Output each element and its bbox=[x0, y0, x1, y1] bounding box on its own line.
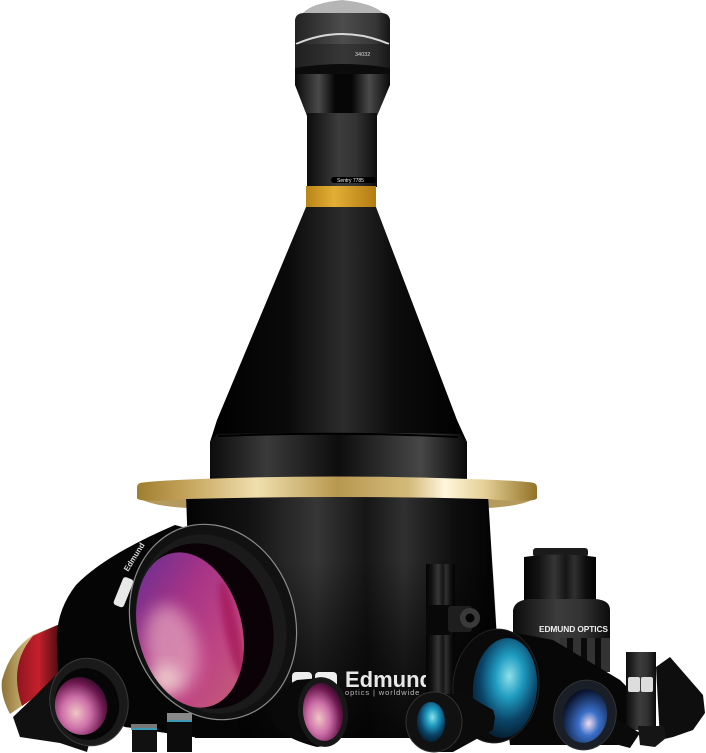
front blue lens bbox=[406, 692, 495, 752]
logo on barrel bbox=[113, 541, 147, 608]
ring underside bbox=[137, 496, 537, 508]
miniature lenses bbox=[131, 713, 192, 752]
cone base bbox=[210, 433, 467, 480]
large pink lens bbox=[56, 524, 298, 738]
neck bbox=[307, 113, 377, 187]
label: EDMUND OPTICS bbox=[539, 624, 608, 634]
lower body bbox=[186, 495, 497, 738]
logo mark bbox=[292, 672, 312, 688]
lens reflection bbox=[137, 580, 249, 696]
small blue lens bbox=[547, 674, 640, 753]
camera lens top right bbox=[513, 548, 610, 672]
post lens with side knob bbox=[426, 564, 480, 694]
main telecentric lens: Sentry 7785 bbox=[337, 178, 364, 184]
main telecentric lens bbox=[137, 0, 537, 738]
gold ring bbox=[137, 476, 537, 501]
Edmund Optics logo on body bbox=[292, 667, 433, 697]
center pink lens bbox=[272, 675, 352, 749]
Edmund Optics logo on body: optics | worldwide bbox=[345, 688, 420, 697]
logo on barrel: Edmund bbox=[122, 541, 147, 573]
small pink lens bbox=[13, 651, 136, 753]
lens head bbox=[295, 13, 390, 75]
cone bbox=[210, 207, 467, 442]
large blue lens bbox=[448, 625, 640, 747]
right tube and prism bbox=[626, 652, 705, 747]
top cap bbox=[295, 0, 390, 20]
serial numbers: 34032 bbox=[355, 52, 370, 58]
taper bbox=[295, 74, 390, 116]
gold band bbox=[306, 186, 376, 207]
red gold lens bbox=[2, 624, 60, 714]
Edmund Optics logo on body: Edmund bbox=[345, 667, 433, 692]
